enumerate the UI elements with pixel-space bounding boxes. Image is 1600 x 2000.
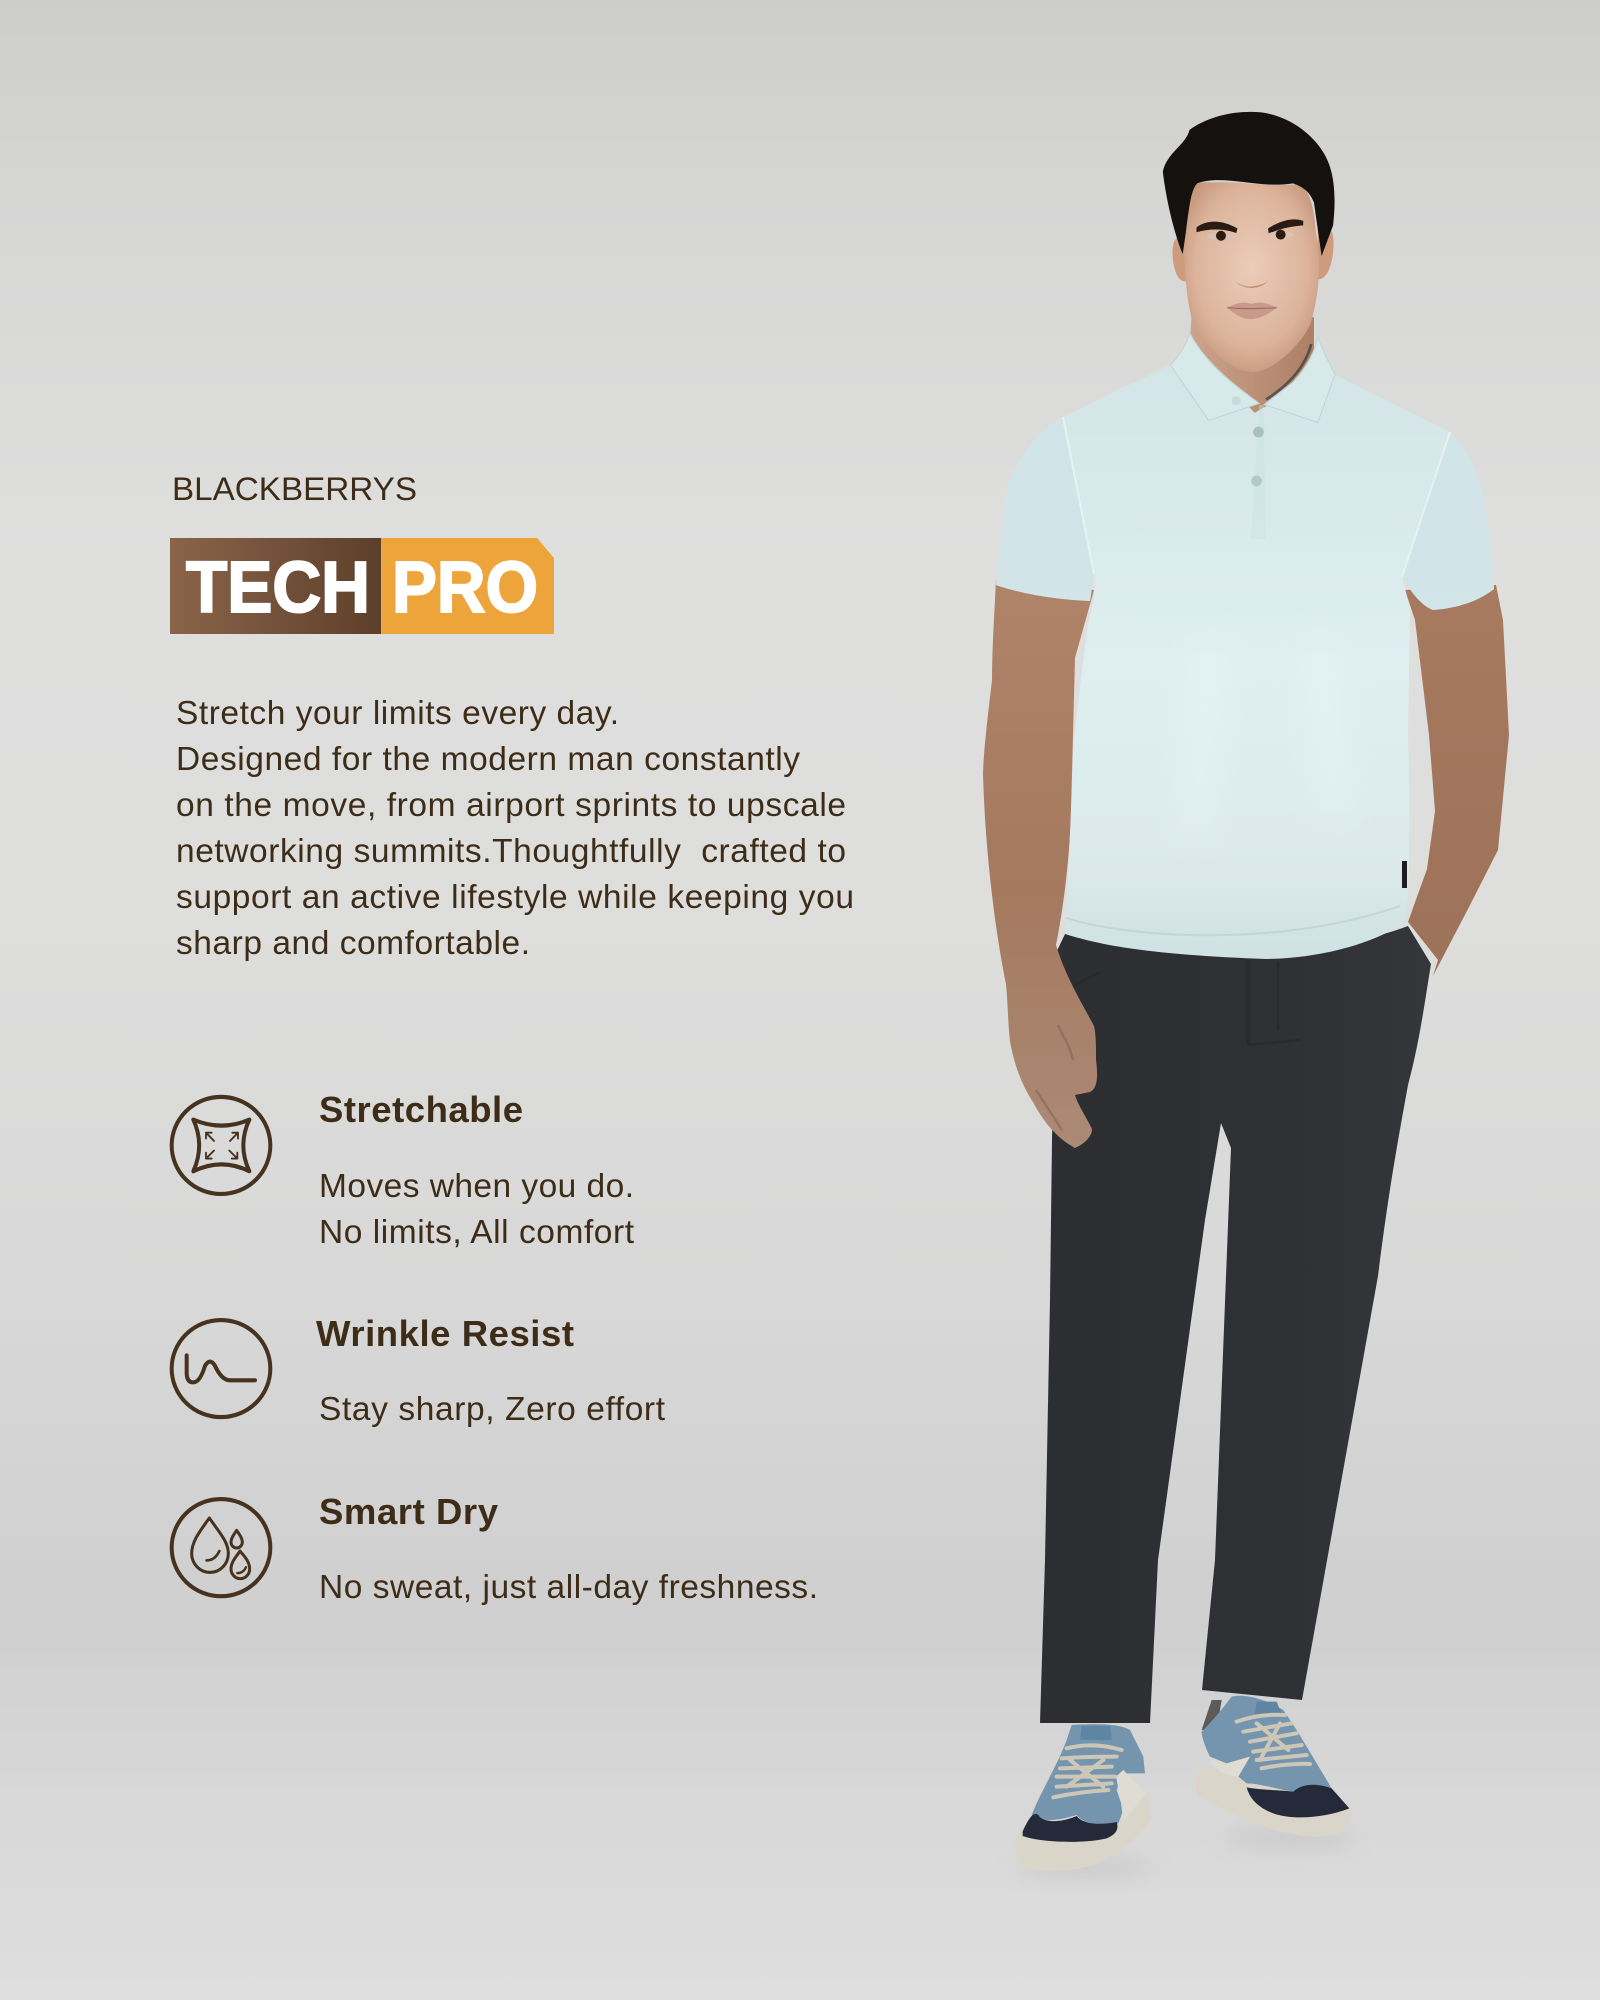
logo: Tech Pro badge: PRO [392, 548, 538, 628]
floor shadows [1015, 1828, 1355, 1877]
left shoe [1016, 1724, 1151, 1871]
feature: wrinkle resist: Wrinkle Resist [316, 1313, 574, 1354]
intro paragraph: networking summits.Thoughtfully crafted to [176, 833, 846, 870]
face [1184, 182, 1319, 372]
icon: smart dry [172, 1499, 270, 1596]
feature: smart dry: Smart Dry [319, 1491, 499, 1532]
feature: smart dry: No sweat, just all-day freshness. [319, 1569, 818, 1606]
feature: wrinkle resist [316, 1313, 666, 1428]
head and collar [1163, 112, 1335, 539]
neck [1190, 317, 1314, 413]
feature: stretchable [319, 1089, 635, 1251]
trousers [1040, 926, 1431, 1723]
feature: wrinkle resist: Stay sharp, Zero effort [319, 1391, 666, 1428]
fabric folds [1195, 660, 1335, 820]
polo shirt [996, 365, 1494, 959]
feature: stretchable: No limits, All comfort [319, 1214, 635, 1251]
intro paragraph: on the move, from airport sprints to upscale [176, 787, 846, 824]
brand name: BLACKBERRYS [172, 471, 417, 507]
intro paragraph: Stretch your limits every day. [176, 695, 619, 732]
collar [1170, 333, 1259, 421]
logo: Tech Pro badge [170, 538, 554, 634]
model photo illustration [983, 112, 1509, 1877]
feature: smart dry [319, 1491, 818, 1606]
feature: stretchable: Moves when you do. [319, 1168, 634, 1205]
logo: Tech Pro badge: TECH [186, 548, 370, 628]
feature: stretchable: Stretchable [319, 1089, 523, 1130]
icon: stretchable [172, 1097, 270, 1194]
intro paragraph: Designed for the modern man constantly [176, 741, 800, 778]
right arm [1405, 585, 1509, 976]
shoes [1016, 1696, 1351, 1871]
intro paragraph: sharp and comfortable. [176, 925, 530, 962]
right shoe [1196, 1696, 1351, 1837]
eyes and brows [1196, 222, 1237, 233]
left arm and hand [983, 580, 1097, 1148]
icon: wrinkle resist [172, 1320, 270, 1417]
ears [1173, 236, 1188, 281]
intro paragraph: support an active lifestyle while keeping you [176, 879, 854, 916]
nose and mouth [1236, 281, 1268, 288]
buttons [1232, 396, 1241, 405]
intro paragraph [176, 695, 854, 962]
hair [1163, 112, 1335, 256]
